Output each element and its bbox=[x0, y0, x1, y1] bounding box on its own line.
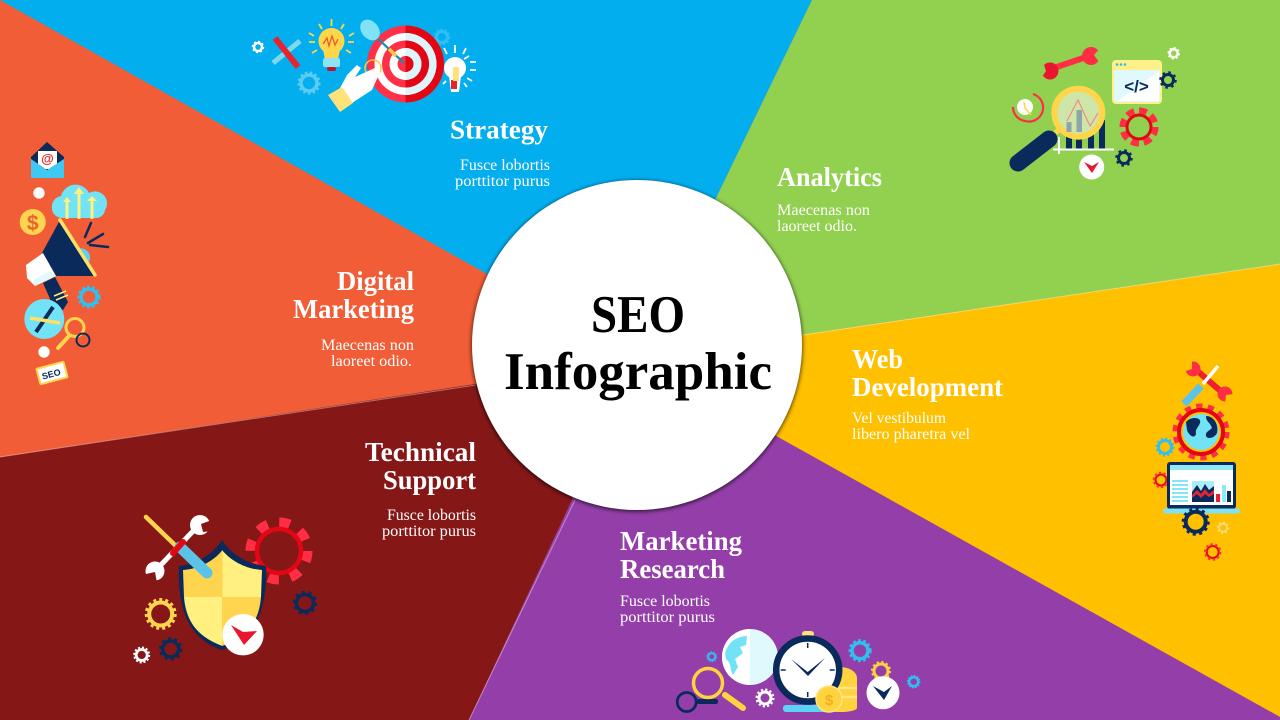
icon: analytics magnifier cluster bbox=[1013, 47, 1179, 180]
panel: digital marketing wedge bbox=[0, 0, 638, 457]
text: technical support bbox=[365, 437, 476, 540]
panel: web development wedge bbox=[638, 264, 1280, 717]
title bbox=[504, 286, 772, 401]
text: analytics: laoreet odio. bbox=[777, 218, 857, 235]
text: digital marketing: Marketing bbox=[293, 294, 414, 324]
text: marketing research: porttitor purus bbox=[620, 609, 715, 626]
icon: strategy target cluster bbox=[252, 16, 476, 112]
title: Infographic bbox=[504, 343, 772, 401]
text: digital marketing: Maecenas non bbox=[321, 337, 414, 354]
text: analytics: Maecenas non bbox=[777, 202, 870, 219]
text: strategy: Fusce lobortis bbox=[460, 157, 550, 174]
icon: digital marketing megaphone cluster: $ bbox=[27, 212, 39, 235]
text: web development: Development bbox=[852, 372, 1003, 402]
icon: web development gear and laptop cluster bbox=[1154, 360, 1240, 560]
title: SEO bbox=[591, 286, 685, 344]
icon: technical support shield cluster bbox=[134, 515, 316, 662]
text: strategy: Strategy bbox=[450, 114, 549, 144]
panel: marketing research wedge bbox=[469, 359, 1280, 720]
text: marketing research bbox=[620, 526, 742, 626]
text: strategy bbox=[450, 114, 550, 190]
text: analytics bbox=[777, 162, 882, 235]
center circle bbox=[472, 180, 802, 512]
text: digital marketing bbox=[293, 266, 414, 370]
text: marketing research: Fusce lobortis bbox=[620, 593, 710, 610]
text: technical support: Fusce lobortis bbox=[387, 507, 476, 524]
text: technical support: Support bbox=[383, 465, 476, 495]
panel: analytics wedge bbox=[638, 0, 1280, 359]
icon: analytics magnifier cluster: </> bbox=[1124, 77, 1149, 96]
text: digital marketing: Digital bbox=[337, 266, 414, 296]
text: analytics: Analytics bbox=[777, 162, 882, 192]
panel: technical support wedge bbox=[0, 359, 638, 720]
icon: marketing research clock cluster: $ bbox=[825, 692, 834, 709]
icon: digital marketing megaphone cluster bbox=[20, 142, 108, 384]
icon: marketing research clock cluster bbox=[677, 629, 920, 712]
text: strategy: porttitor purus bbox=[455, 173, 550, 190]
text: technical support: porttitor purus bbox=[382, 523, 476, 540]
text: digital marketing: laoreet odio. bbox=[331, 353, 412, 370]
text: marketing research: Research bbox=[620, 554, 725, 584]
text: web development: libero pharetra vel bbox=[852, 426, 970, 443]
text: web development: Web bbox=[852, 344, 903, 374]
panel: strategy wedge bbox=[0, 0, 812, 359]
text: web development bbox=[852, 344, 1003, 443]
icon: digital marketing megaphone cluster: SEO bbox=[41, 367, 62, 382]
text: web development: Vel vestibulum bbox=[852, 410, 946, 427]
text: technical support: Technical bbox=[365, 437, 476, 467]
icon: digital marketing megaphone cluster: @ bbox=[41, 151, 54, 166]
text: marketing research: Marketing bbox=[620, 526, 742, 556]
